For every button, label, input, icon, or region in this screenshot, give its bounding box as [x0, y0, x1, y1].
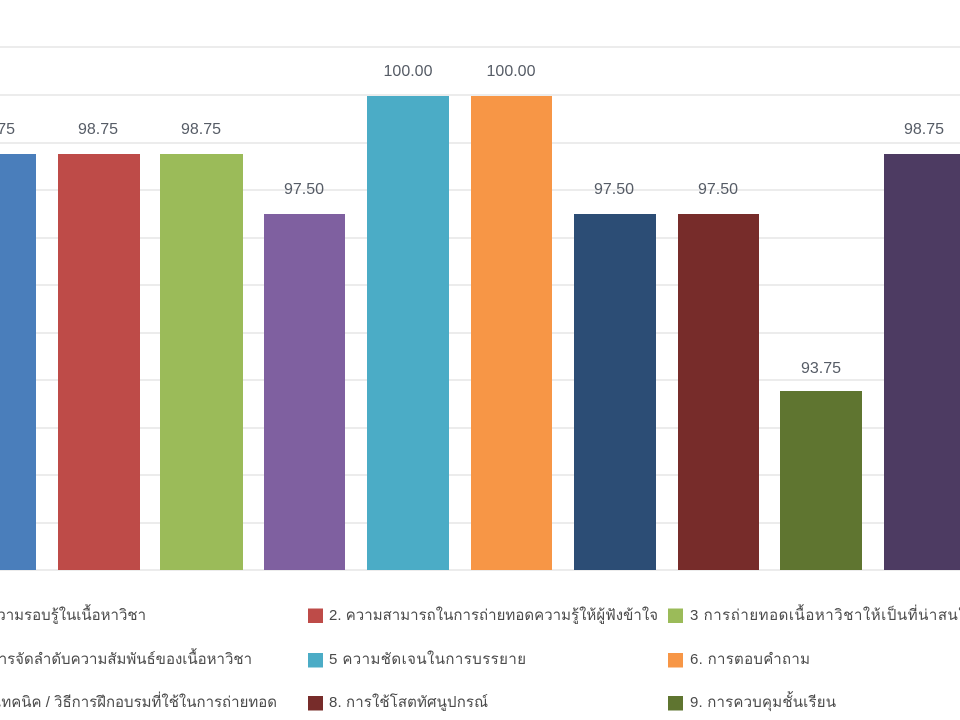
value labels: 100.00: [487, 63, 536, 80]
value labels: 98.75: [181, 121, 221, 138]
bars: [0, 96, 960, 570]
value labels: 97.50: [594, 181, 634, 198]
value labels: 97.50: [698, 181, 738, 198]
value labels: 98.75: [904, 121, 944, 138]
value labels: 93.75: [801, 360, 841, 377]
value labels: 100.00: [384, 63, 433, 80]
legend: 2. ความสามารถในการถ่ายทอดความรู้ให้ผู้ฟังข้าใจ: [329, 606, 658, 624]
legend: 8. การใช้โสตทัศนูปกรณ์: [329, 693, 488, 711]
legend: 6. การตอบคำถาม: [690, 651, 810, 668]
value labels: [0, 63, 944, 377]
legend: 5 ความชัดเจนในการบรรยาย: [329, 650, 526, 668]
legend: [0, 604, 960, 712]
value labels: 97.50: [284, 181, 324, 198]
legend: เทคนิค / วิธีการฝึกอบรมที่ใช้ในการถ่ายทอด: [0, 691, 277, 711]
legend: 9. การควบคุมชั้นเรียน: [690, 691, 836, 712]
value labels: 98.75: [78, 121, 118, 138]
